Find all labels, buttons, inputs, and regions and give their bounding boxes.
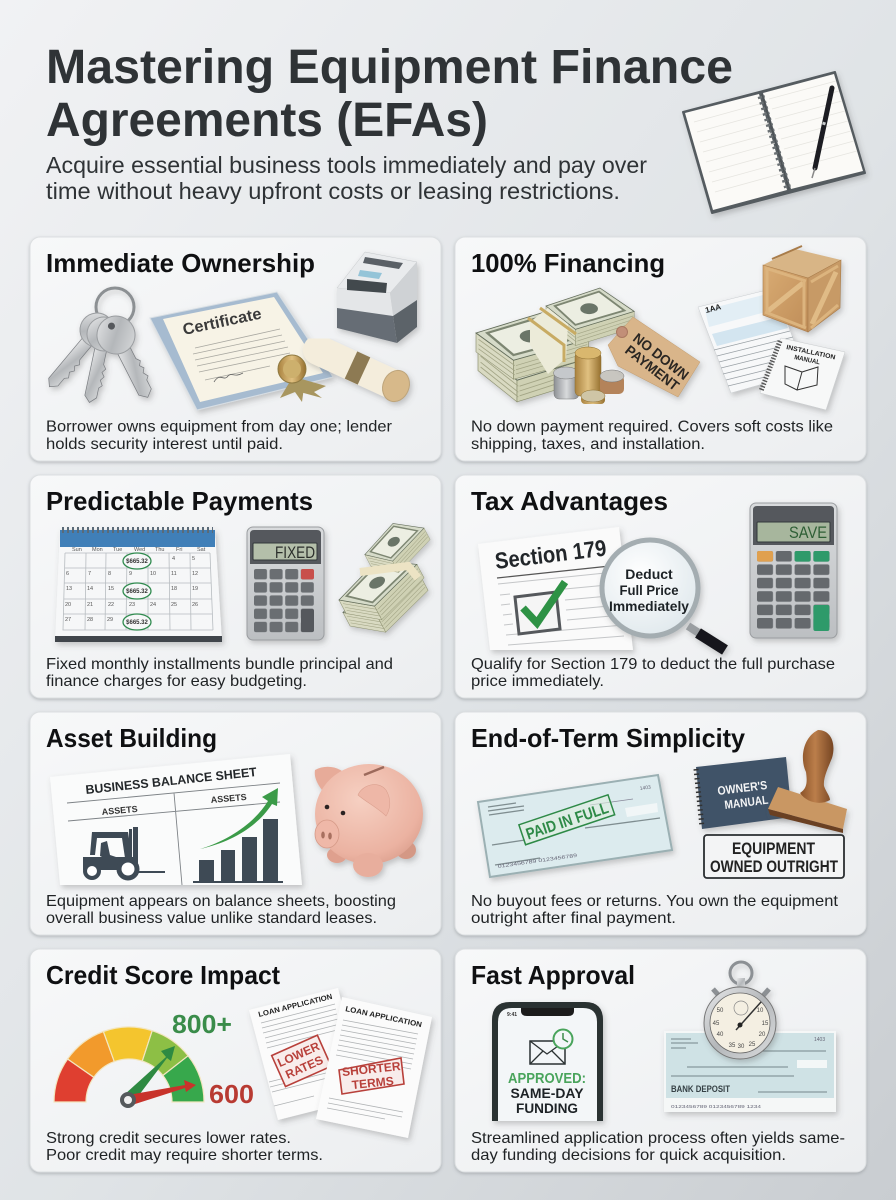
icon: wall calendar	[55, 530, 222, 642]
subtitle	[46, 152, 647, 204]
icon: magnifying glass: Full Price	[620, 582, 679, 598]
icon: wall calendar: 10	[150, 571, 156, 577]
icon: phone approved: APPROVED:	[508, 1071, 586, 1087]
icon: installation manual	[760, 338, 845, 410]
icon: stopwatch: 10	[757, 1008, 764, 1014]
icon: bank deposit check: 1403	[814, 1037, 825, 1043]
icon: wall calendar: 23	[129, 602, 135, 608]
icon: piggy bank	[315, 764, 423, 877]
icon: phone approved: 9:41	[507, 1012, 517, 1018]
text: 100% Financing description: No down payment required. Covers soft costs like	[471, 418, 833, 436]
icon: wall calendar: 18	[171, 586, 177, 592]
label: 800+: 800+	[172, 1009, 232, 1039]
text: End-of-Term Simplicity description	[471, 893, 839, 927]
icon: paid check	[478, 775, 672, 877]
title	[46, 41, 733, 147]
icon: loan application lower rates: LOWER	[275, 1039, 322, 1070]
icon: wall calendar: 28	[87, 617, 93, 623]
icon: magnifying glass: Deduct	[625, 566, 673, 582]
icon: cash stack	[331, 512, 437, 646]
text: Predictable Payments description: finance charges for easy budgeting.	[46, 673, 307, 690]
icon: wall calendar: $665.32	[126, 589, 148, 595]
icon: owner's manual	[696, 757, 792, 829]
icon: owner's manual: OWNER'S	[717, 778, 768, 798]
icon: wall calendar: Sat	[197, 547, 206, 553]
text: Tax Advantages description	[471, 656, 835, 690]
icon: loan application lower rates	[249, 988, 365, 1120]
icon: stopwatch: 50	[717, 1008, 724, 1014]
icon: calculator SAVE	[750, 503, 837, 638]
icon: cash stacks	[476, 288, 634, 402]
icon: tax form	[698, 288, 805, 393]
icon: stopwatch: 25	[749, 1042, 756, 1048]
bar chart	[193, 819, 283, 883]
icon: wall calendar: 22	[108, 602, 114, 608]
panel: 100% Financing	[455, 237, 866, 461]
panel: Immediate Ownership	[30, 237, 441, 461]
panel: End-of-Term Simplicity	[455, 712, 866, 935]
text: Asset Building description: Equipment appears on balance sheets, boosting	[46, 893, 396, 910]
icon: bank deposit check: BANK DEPOSIT	[671, 1084, 730, 1095]
arrow: red needle	[128, 1080, 196, 1105]
icon: no down payment tag: PAYMENT	[622, 342, 683, 394]
icon: open notebook with pen	[683, 72, 865, 213]
icon: wall calendar: 14	[87, 586, 93, 592]
icon: loan application shorter terms: LOAN APPLICATION	[345, 1004, 423, 1029]
heading: Immediate Ownership: Immediate Ownership	[46, 248, 315, 278]
icon: calculator FIXED	[247, 527, 324, 640]
text: Immediate Ownership description: Borrower owns equipment from day one; lender	[46, 418, 393, 436]
text: Immediate Ownership description	[46, 418, 393, 453]
icon: wall calendar: 7	[88, 571, 91, 577]
panel: Predictable Payments	[30, 475, 441, 698]
heading: Fast Approval: Fast Approval	[471, 960, 635, 990]
callout: equipment owned outright: OWNED OUTRIGHT	[710, 857, 838, 876]
icon: wall calendar: 24	[150, 602, 156, 608]
arrow: green growth	[200, 788, 278, 849]
panel: Asset Building	[30, 712, 441, 935]
icon: wall calendar: 9	[129, 571, 132, 577]
text: Fast Approval description	[471, 1130, 845, 1164]
heading: Credit Score Impact: Credit Score Impact	[46, 960, 280, 990]
icon: wall calendar: 29	[107, 617, 113, 623]
icon: wall calendar: Wed	[134, 547, 145, 553]
text: Asset Building description	[46, 893, 396, 927]
text: End-of-Term Simplicity description: No buyout fees or returns. You own the equipment	[471, 893, 839, 910]
chart: balance sheet with forklift and bars: ASSETS	[210, 792, 247, 805]
text: Credit Score Impact description: Poor credit may require shorter terms.	[46, 1147, 323, 1164]
icon: wall calendar: Tue	[113, 547, 122, 553]
icon: wall calendar: 21	[87, 602, 93, 608]
text: Fast Approval description: Streamlined application process often yields same-	[471, 1130, 845, 1147]
text: 100% Financing description	[471, 418, 833, 453]
text: Immediate Ownership description: holds security interest until paid.	[46, 436, 283, 453]
icon: wall calendar: Fri	[176, 547, 182, 553]
icon: wall calendar: Sun	[72, 547, 82, 553]
icon: wooden crate	[763, 246, 841, 332]
icon: envelope with clock	[530, 1030, 572, 1064]
icon: stopwatch: 35	[729, 1043, 736, 1049]
icon: wall calendar: 15	[108, 586, 114, 592]
icon: gold seal	[278, 355, 326, 402]
heading: Tax Advantages: Tax Advantages	[471, 486, 668, 516]
subtitle: time without heavy upfront costs or leasing restrictions.	[46, 178, 620, 204]
text: Predictable Payments description: Fixed monthly installments bundle principal and	[46, 656, 393, 673]
icon: wall calendar: 19	[192, 586, 198, 592]
title: Agreements (EFAs)	[46, 94, 488, 147]
panel: Credit Score Impact	[30, 949, 441, 1172]
heading: Asset Building: Asset Building	[46, 723, 217, 753]
panel: Fast Approval	[455, 949, 866, 1172]
icon: wall calendar: $665.32	[126, 620, 148, 626]
text: Predictable Payments description	[46, 656, 393, 690]
icon: wall calendar: 11	[171, 571, 177, 577]
icon: tax form: 1AA	[704, 302, 722, 315]
icon: bank deposit check	[664, 1031, 836, 1112]
icon: wall calendar: 5	[192, 556, 195, 562]
icon: certificate: Certificate	[181, 306, 263, 339]
heading: 100% Financing: 100% Financing	[471, 248, 665, 278]
icon: stopwatch: 30	[738, 1044, 745, 1050]
icon: needle hub	[122, 1094, 134, 1106]
icon: wall calendar: 12	[192, 571, 198, 577]
icon: calculator SAVE: SAVE	[789, 523, 827, 542]
icon: bank deposit check: 0123456789 0123456789 1234	[671, 1104, 762, 1109]
icon: Section 179 paper: Section 179	[493, 535, 608, 574]
icon: wall calendar: 6	[66, 571, 69, 577]
text: Credit Score Impact description	[46, 1130, 323, 1164]
text: Tax Advantages description: price immediately.	[471, 673, 604, 690]
icon: magnifying glass: Immediately	[609, 598, 689, 614]
callout: equipment owned outright	[704, 835, 844, 878]
icon: stopwatch: 15	[762, 1021, 769, 1027]
text: Fast Approval description: day funding decisions for quick acquisition.	[471, 1147, 786, 1164]
icon: no down payment tag: NO DOWN	[630, 330, 692, 383]
heading: Predictable Payments: Predictable Payments	[46, 486, 313, 516]
icon: stopwatch: 45	[713, 1021, 720, 1027]
icon: wall calendar: 27	[65, 617, 71, 623]
subtitle: Acquire essential business tools immediately and pay over	[46, 152, 647, 178]
icon: owner's manual: MANUAL	[724, 793, 769, 812]
text: Credit Score Impact description: Strong credit secures lower rates.	[46, 1130, 291, 1147]
icon: rolled scroll	[318, 350, 414, 406]
chart: credit score gauge	[54, 1027, 204, 1106]
icon: wall calendar: $665.32	[126, 559, 148, 565]
arrow: green needle	[124, 1046, 175, 1103]
panel: Tax Advantages	[455, 475, 866, 698]
label: 600: 600	[209, 1079, 254, 1109]
icon: printer	[337, 252, 417, 343]
icon: magnifying glass	[602, 540, 725, 650]
icon: wall calendar: 26	[192, 602, 198, 608]
icon: installation manual: MANUAL	[794, 354, 820, 366]
icon: Section 179 paper	[478, 527, 633, 650]
icon: wall calendar: 25	[171, 602, 177, 608]
chart: balance sheet with forklift and bars	[50, 754, 302, 885]
icon: paid check: 1403	[639, 784, 652, 792]
icon: certificate	[150, 292, 333, 410]
icon: stopwatch	[704, 962, 776, 1059]
icon: paid check: 0123456789 0123456789	[497, 853, 578, 870]
callout: equipment owned outright: EQUIPMENT	[732, 839, 816, 858]
icon: rubber stamp	[768, 730, 847, 833]
title: Mastering Equipment Finance	[46, 41, 733, 94]
icon: loan application shorter terms: SHORTER	[341, 1059, 402, 1079]
heading: End-of-Term Simplicity: End-of-Term Simplicity	[471, 723, 746, 753]
icon: phone approved: FUNDING	[516, 1100, 578, 1116]
icon: coins	[554, 347, 624, 404]
icon: loan application lower rates: RATES	[283, 1053, 325, 1082]
icon: phone approved	[492, 1002, 603, 1121]
icon: wall calendar: 20	[65, 602, 71, 608]
icon: forklift	[83, 827, 165, 878]
icon: loan application lower rates: LOAN APPLICATION	[257, 992, 333, 1019]
chart: balance sheet with forklift and bars: BUSINESS BALANCE SHEET	[85, 765, 258, 797]
icon: stopwatch: 20	[759, 1032, 766, 1038]
icon: loan application shorter terms	[316, 997, 432, 1138]
icon: wall calendar: 4	[172, 556, 175, 562]
icon: loan application shorter terms: TERMS	[351, 1074, 394, 1092]
icon: stopwatch: 40	[717, 1032, 724, 1038]
icon: calculator FIXED: FIXED	[275, 543, 315, 562]
icon: keys	[36, 288, 165, 406]
text: Tax Advantages description: Qualify for Section 179 to deduct the full purchase	[471, 656, 835, 673]
icon: installation manual: INSTALLATION	[786, 344, 836, 361]
text: Asset Building description: overall business value unlike standard leases.	[46, 910, 377, 927]
icon: wall calendar: Mon	[92, 547, 103, 553]
text: End-of-Term Simplicity description: outright after final payment.	[471, 910, 676, 927]
chart: balance sheet with forklift and bars: ASSETS	[101, 804, 138, 817]
icon: wall calendar: 8	[108, 571, 111, 577]
icon: wall calendar: Thu	[155, 547, 164, 553]
icon: phone approved: SAME-DAY	[510, 1085, 584, 1101]
icon: wall calendar: 13	[66, 586, 72, 592]
icon: paid check: PAID IN FULL	[524, 800, 611, 843]
icon: no down payment tag	[608, 317, 700, 397]
text: 100% Financing description: shipping, taxes, and installation.	[471, 436, 705, 453]
